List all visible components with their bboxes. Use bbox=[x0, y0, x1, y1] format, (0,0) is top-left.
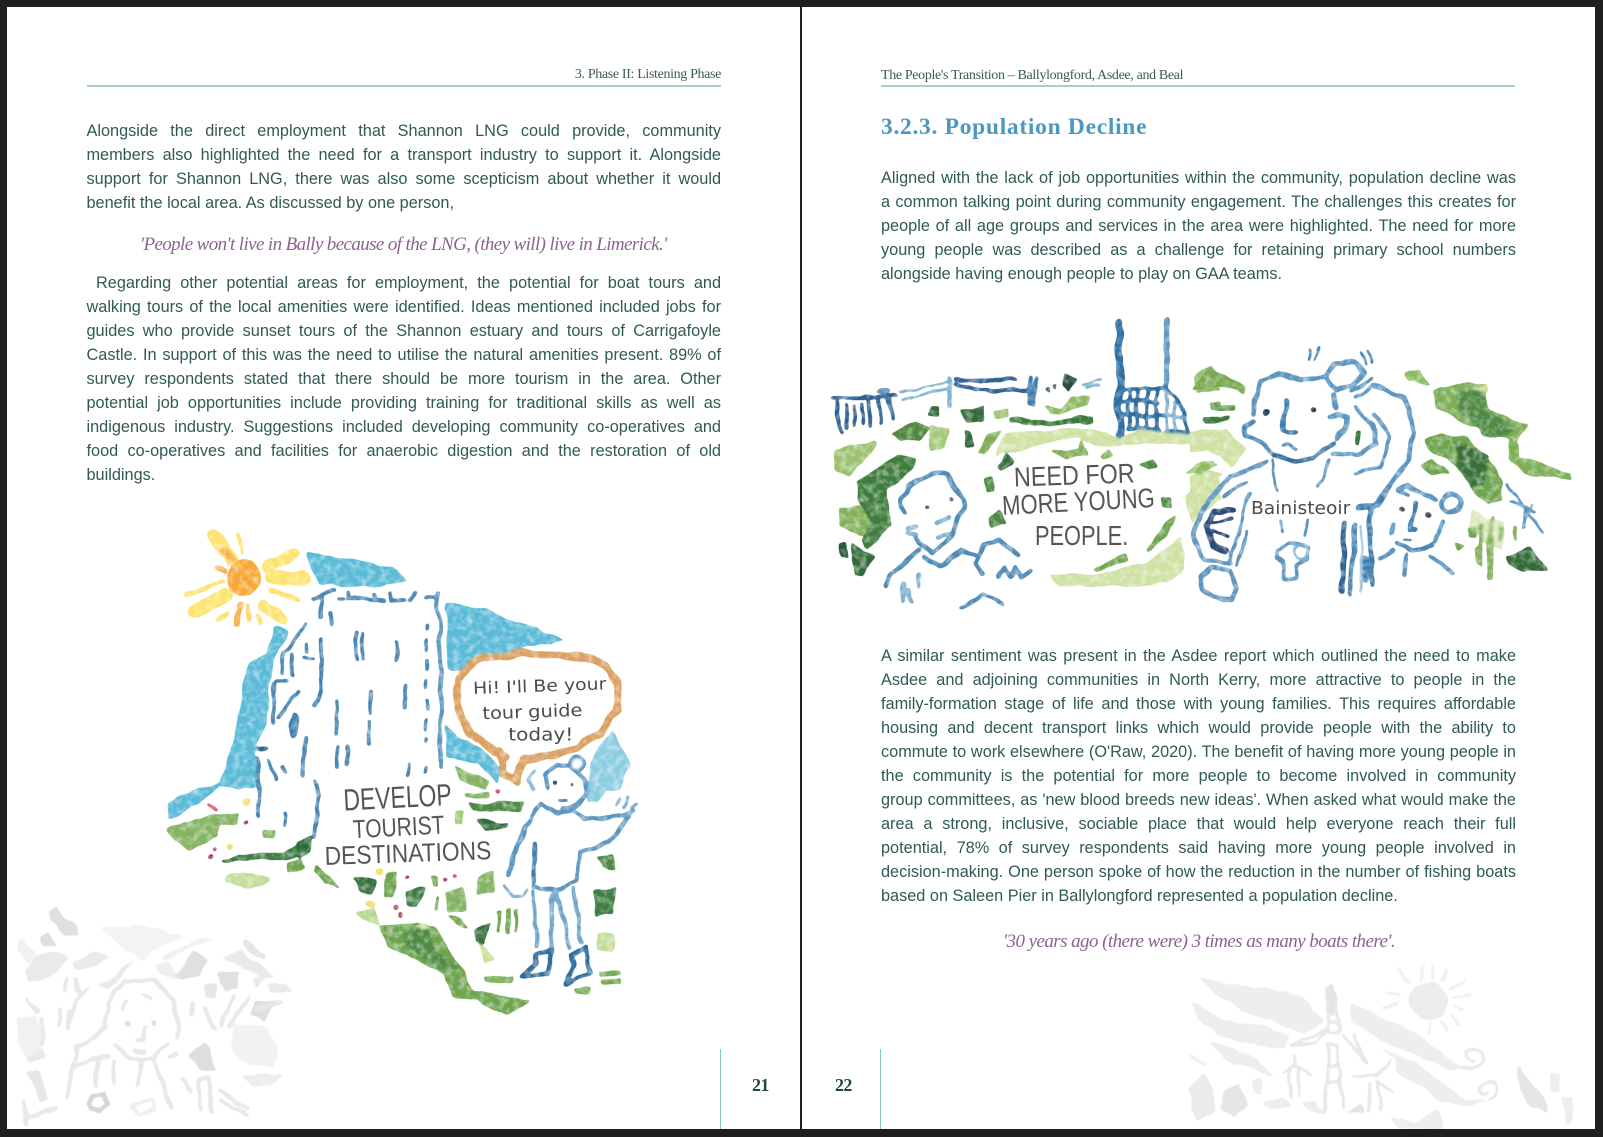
right page: second paragraph: the community is the potential for more people to become involved in community bbox=[881, 766, 1516, 784]
left page: second paragraph: guides who provide sunset tours of the Shannon estuary and tours of Carrigafoyle bbox=[86, 322, 721, 340]
watermark: left page child and trees bbox=[17, 907, 294, 1125]
handwritten shirt text: Bainisteoir bbox=[1251, 498, 1351, 519]
left page running header: 3. Phase II: Listening Phase bbox=[575, 67, 721, 82]
right page footer rule and page number bbox=[880, 1049, 881, 1129]
icon: sun bbox=[187, 534, 303, 625]
right page: opening paragraph: Aligned with the lack of job opportunities within the community, population decline was bbox=[881, 168, 1516, 186]
left page: second paragraph: walking tours of the local amenities were identified. Ideas mentioned included jobs for bbox=[86, 298, 721, 316]
tour guide figure bbox=[505, 757, 637, 985]
left page: second paragraph: Regarding other potential areas for employment, the potential for boat tours and bbox=[96, 274, 721, 292]
left page footer rule and page number bbox=[720, 1049, 721, 1129]
left page: opening paragraph: support for Shannon LNG, there was also some scepticism about whether it would bbox=[86, 170, 721, 188]
handwritten speech bubble text: Hi! I'll Be your bbox=[473, 674, 607, 698]
coach figure bbox=[1193, 347, 1413, 600]
left page: second paragraph: buildings. bbox=[86, 466, 155, 484]
illustration: need for more young people, left half bbox=[830, 321, 1220, 608]
watermark: right page wind turbines and sun bbox=[1190, 965, 1573, 1128]
text: 22 bbox=[835, 1075, 852, 1095]
stadium strokes bbox=[830, 377, 1101, 433]
goalposts bbox=[1119, 321, 1188, 433]
foliage right bbox=[1190, 367, 1572, 580]
illustration: castle tourism scene bbox=[167, 534, 637, 1017]
left page: second paragraph: survey respondents stated that there should be more tourism in the area. Other bbox=[86, 370, 721, 388]
fields bbox=[995, 427, 1220, 587]
right page running header: The People's Transition – Ballylongford, Asdee, and Beal bbox=[881, 68, 1183, 83]
illustration: need for more young people, right half bbox=[1190, 347, 1572, 600]
right page: opening paragraph: people of all age groups and services in the area were highlighted. The need for more bbox=[881, 216, 1516, 234]
right page sheet bbox=[802, 7, 1595, 1129]
left page: opening paragraph: benefit the local area. As discussed by one person, bbox=[86, 194, 454, 212]
handwritten speech bubble text: today! bbox=[508, 726, 573, 746]
left page: second paragraph: indigenous industry. Suggestions included developing community co-operatives and bbox=[86, 418, 721, 436]
illustrations and watermarks bbox=[17, 317, 1574, 1129]
hash marks bbox=[1507, 483, 1543, 533]
text: 21 bbox=[752, 1075, 769, 1095]
foliage bbox=[835, 367, 1220, 577]
castle strokes bbox=[258, 590, 442, 837]
right page: second paragraph: housing and decent transport links which would provide people with the ability to bbox=[881, 718, 1516, 736]
right page: pull quote: '30 years ago (there were) 3 times as many boats there'. bbox=[1003, 931, 1395, 952]
right page: second paragraph: commute to work elsewhere (O'Raw, 2020). The benefit of having more young people in bbox=[881, 742, 1516, 760]
handwritten caption: need for more young people bbox=[1001, 457, 1155, 551]
heading: population decline: 3.2.3. Population Decline bbox=[881, 114, 1147, 140]
right page: second paragraph: group committees, as 'new blood breeds new ideas'. When asked what would make the bbox=[881, 790, 1516, 808]
right page: second paragraph bbox=[881, 646, 1516, 904]
left page: opening paragraph: Alongside the direct employment that Shannon LNG could provide, community bbox=[86, 122, 721, 140]
right page: opening paragraph: young people was described as a challenge for retaining primary school numbers bbox=[881, 240, 1516, 258]
left page: second paragraph: food co-operatives and facilities for anaerobic digestion and the restoration of old bbox=[86, 442, 721, 460]
right page: second paragraph: based on Saleen Pier in Ballylongford represented a population decline. bbox=[881, 886, 1398, 904]
speech bubble outline bbox=[457, 654, 618, 782]
right page: second paragraph: area a strong, inclusive, sociable place that would help everyone reach their full bbox=[881, 814, 1516, 832]
left page: second paragraph bbox=[86, 274, 722, 484]
right page: second paragraph: decision-making. One person spoke of how the reduction in the number of fishing boats bbox=[881, 862, 1516, 880]
handwritten caption: develop tourist destinations: DEVELOP bbox=[343, 778, 453, 818]
handwritten caption: need for more young people: MORE YOUNG bbox=[1001, 482, 1155, 521]
sky washes bbox=[168, 552, 630, 820]
right page: second paragraph: Asdee and adjoining communities in North Kerry, more attractive to people in the bbox=[881, 670, 1516, 688]
right page: opening paragraph bbox=[881, 168, 1516, 282]
grass and foliage bbox=[167, 767, 620, 1017]
right page: second paragraph: A similar sentiment was present in the Asdee report which outlined the need to make bbox=[881, 646, 1516, 664]
right page: opening paragraph: alongside having enough people to play on GAA teams. bbox=[881, 264, 1282, 282]
left page: opening paragraph bbox=[86, 122, 721, 212]
right page: second paragraph: family-formation stage of life and those with young families. This requires affordable bbox=[881, 694, 1516, 712]
right page: opening paragraph: a common talking point during community engagement. The challenges this creates for bbox=[881, 192, 1516, 210]
left page: second paragraph: Castle. In support of this was the need to utilise the natural amenities present. 89% of bbox=[86, 346, 721, 364]
handwritten caption: need for more young people: PEOPLE. bbox=[1035, 520, 1128, 551]
handwritten caption: develop tourist destinations bbox=[324, 778, 492, 871]
left page: second paragraph: potential job opportunities include providing training for traditional skills as well as bbox=[86, 394, 721, 412]
right page: second paragraph: potential, 78% of survey respondents said having more young people involved in bbox=[881, 838, 1516, 856]
left page: opening paragraph: members also highlighted the need for a transport industry to support it. Alongside bbox=[86, 146, 721, 164]
left page sheet bbox=[7, 7, 800, 1129]
handwritten caption: develop tourist destinations: TOURIST bbox=[352, 810, 445, 844]
left page: pull quote: 'People won't live in Bally because of the LNG, (they will) live in Limerick.' bbox=[140, 234, 667, 254]
handwritten speech bubble text: tour guide bbox=[482, 701, 583, 724]
handwritten caption: need for more young people: NEED FOR bbox=[1013, 457, 1135, 493]
handwritten speech bubble text bbox=[473, 674, 607, 746]
handwritten caption: develop tourist destinations: DESTINATIONS bbox=[324, 835, 492, 871]
child figure bbox=[1380, 485, 1461, 577]
boy bbox=[885, 473, 1030, 608]
flowers bbox=[208, 789, 502, 919]
